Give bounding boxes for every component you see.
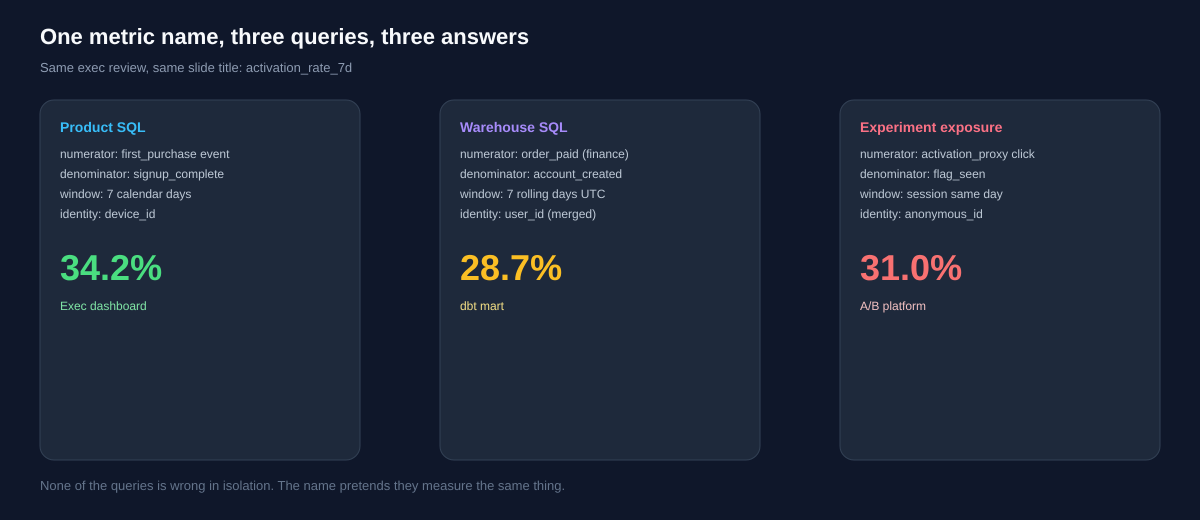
card heading: Product SQL: Product SQL [60, 119, 146, 135]
definition lines: Product SQL [59, 147, 230, 221]
card heading: Experiment exposure: Experiment exposure [860, 119, 1003, 135]
definition lines: Experiment exposure: denominator: flag_seen [860, 167, 985, 181]
definition lines: Warehouse SQL: window: 7 rolling days UTC [459, 187, 606, 201]
subtitle: Same exec review, same slide title: activation_rate_7d [40, 60, 352, 75]
definition lines: Warehouse SQL: denominator: account_created [460, 167, 622, 181]
definition lines: Experiment exposure: numerator: activation_proxy click [860, 147, 1036, 161]
panel: Warehouse SQL [440, 100, 760, 460]
definition lines: Warehouse SQL: numerator: order_paid (finance) [460, 147, 629, 161]
panel: Experiment exposure [840, 100, 1160, 460]
definition lines: Experiment exposure [859, 147, 1036, 221]
definition lines: Warehouse SQL: identity: user_id (merged) [460, 207, 596, 221]
metric value: 28.7%: 28.7% [460, 247, 562, 288]
metric value: 34.2%: 34.2% [60, 247, 162, 288]
footnote: None of the queries is wrong in isolation. The name pretends they measure the same thing. [40, 478, 565, 493]
source label: A/B platform: A/B platform [860, 299, 926, 313]
definition lines: Warehouse SQL [459, 147, 629, 221]
definition lines: Product SQL: identity: device_id [60, 207, 155, 221]
definition lines: Experiment exposure: window: session same day [859, 187, 1003, 201]
source label: dbt mart: dbt mart [460, 299, 505, 313]
metric value: 31.0%: 31.0% [860, 247, 962, 288]
card heading: Warehouse SQL: Warehouse SQL [460, 119, 568, 135]
definition lines: Experiment exposure: identity: anonymous_id [860, 207, 983, 221]
panel: Product SQL [40, 100, 360, 460]
definition lines: Product SQL: denominator: signup_complete [60, 167, 224, 181]
title: One metric name, three queries, three answers [40, 24, 529, 49]
definition lines: Product SQL: window: 7 calendar days [59, 187, 191, 201]
source label: Exec dashboard: Exec dashboard [60, 299, 147, 313]
definition lines: Product SQL: numerator: first_purchase event [60, 147, 230, 161]
